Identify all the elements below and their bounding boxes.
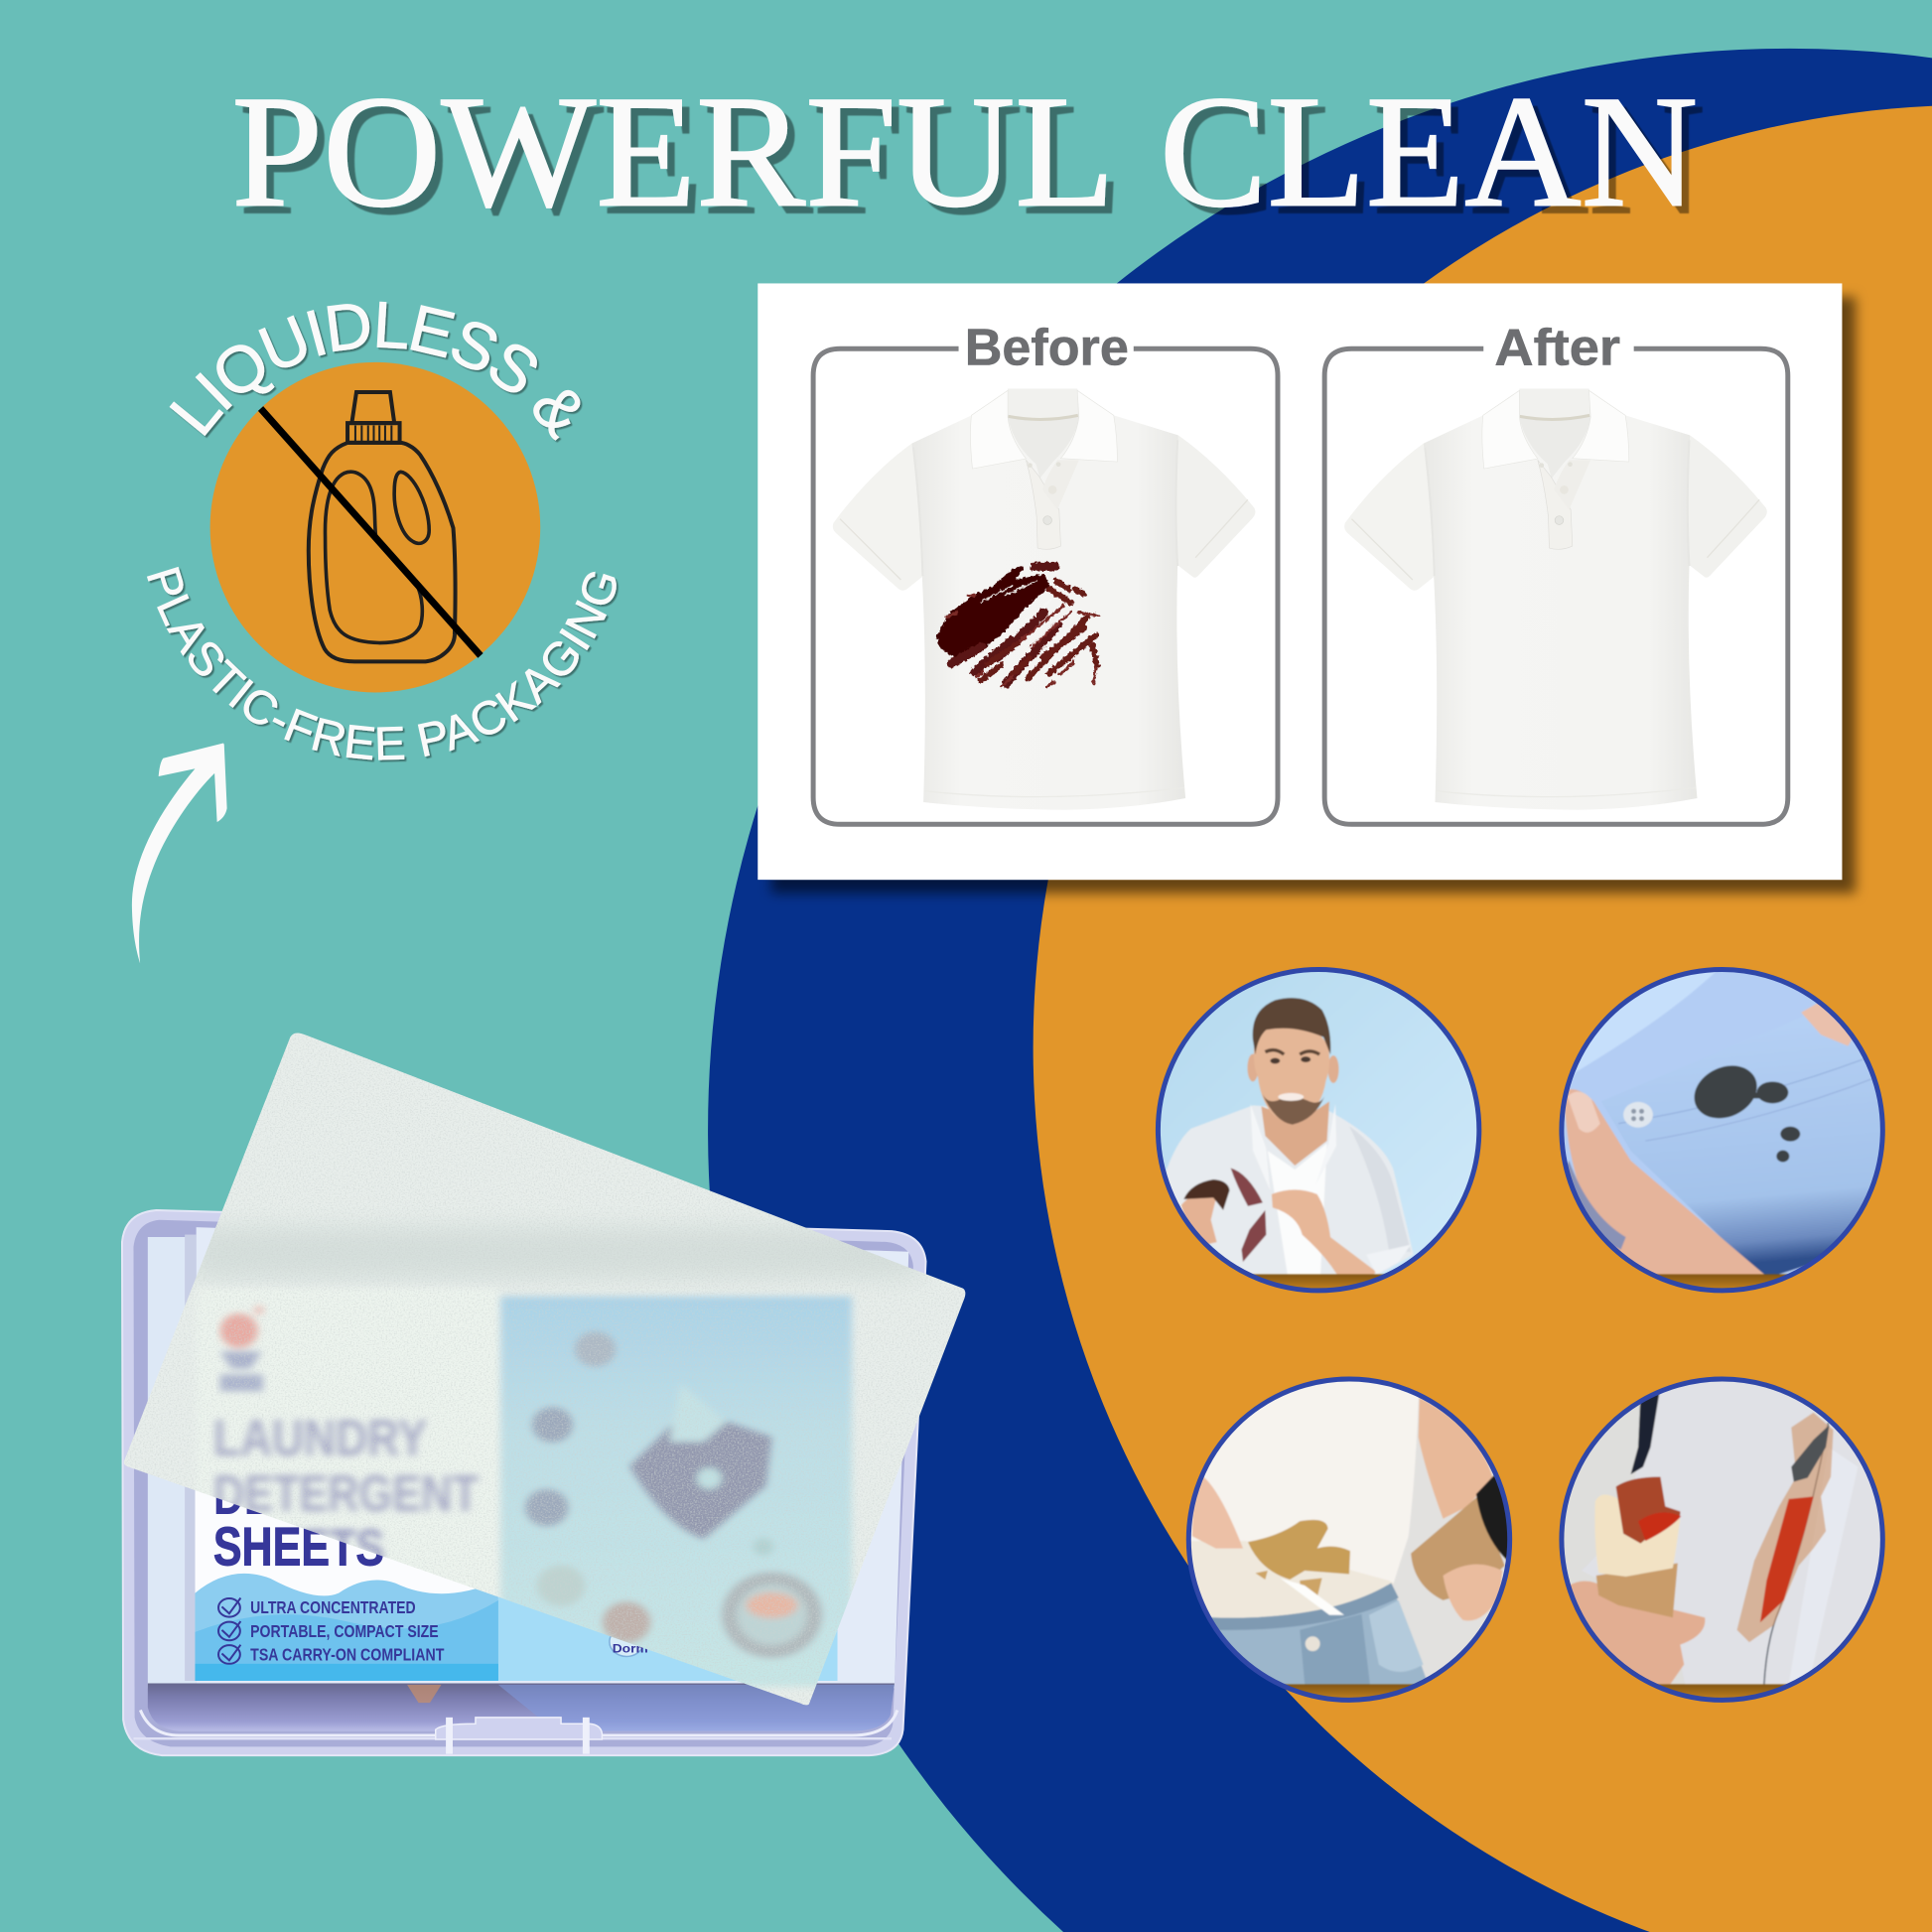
icon: crossed-out bottle — [261, 392, 481, 661]
photo circles: stains — [1152, 963, 1892, 1703]
photo: ketchup stain on grey hoodie — [1557, 1375, 1892, 1703]
before frame — [813, 348, 1278, 824]
case hinge — [436, 1718, 602, 1739]
title: POWERFUL — [231, 63, 1115, 240]
title — [231, 63, 1698, 240]
stain — [936, 567, 1099, 687]
translucent sheet — [124, 1033, 965, 1706]
blurred label beneath sheet — [197, 1289, 852, 1687]
product label: SHEETS — [213, 1516, 384, 1578]
curved heading: LIQUIDLESS & — [169, 302, 583, 443]
clean shirt — [1344, 389, 1767, 810]
photo: man with chocolate stain — [1152, 963, 1487, 1293]
label checklist — [218, 1597, 240, 1664]
blurred text — [211, 1416, 482, 1558]
badge circle — [210, 362, 540, 692]
label waves — [195, 1574, 498, 1681]
before label: Before — [965, 319, 1129, 376]
product label: ULTRA CONCENTRATED — [250, 1599, 416, 1618]
blurred logo — [220, 1306, 264, 1391]
arrow — [132, 744, 227, 963]
photo: ink stain on blue shirt — [1557, 963, 1892, 1293]
card background — [758, 283, 1842, 880]
product label: PORTABLE, COMPACT SIZE — [250, 1622, 439, 1641]
badge: liquidless and plastic-free — [147, 302, 620, 762]
orange curved shape — [1034, 106, 1932, 1932]
product label: TSA CARRY-ON COMPLIANT — [250, 1646, 445, 1665]
curved subheading: PLASTIC-FREE PACKAGING — [147, 566, 620, 762]
title: CLEAN — [1160, 63, 1698, 240]
photo: coffee stain on white top — [1183, 1375, 1520, 1703]
product label: Dorm — [613, 1641, 648, 1655]
paper insert — [148, 1237, 197, 1688]
stained shirt — [833, 389, 1255, 810]
blurred text: DETERGENT — [213, 1464, 479, 1522]
blurred text: LAUNDRY — [213, 1409, 427, 1466]
after label: After — [1494, 319, 1620, 376]
label title: DETERGENT — [213, 1464, 476, 1526]
blurred laundry illustrations — [525, 1331, 822, 1658]
plastic case — [122, 1210, 926, 1755]
case tray — [148, 1683, 895, 1731]
after frame — [1324, 348, 1788, 824]
product: detergent sheets in case — [99, 1013, 993, 1755]
panel: before and after — [758, 283, 1842, 880]
product label — [195, 1286, 838, 1681]
blurred text: SHEETS — [213, 1519, 384, 1577]
blue curved shape — [708, 49, 1932, 1932]
